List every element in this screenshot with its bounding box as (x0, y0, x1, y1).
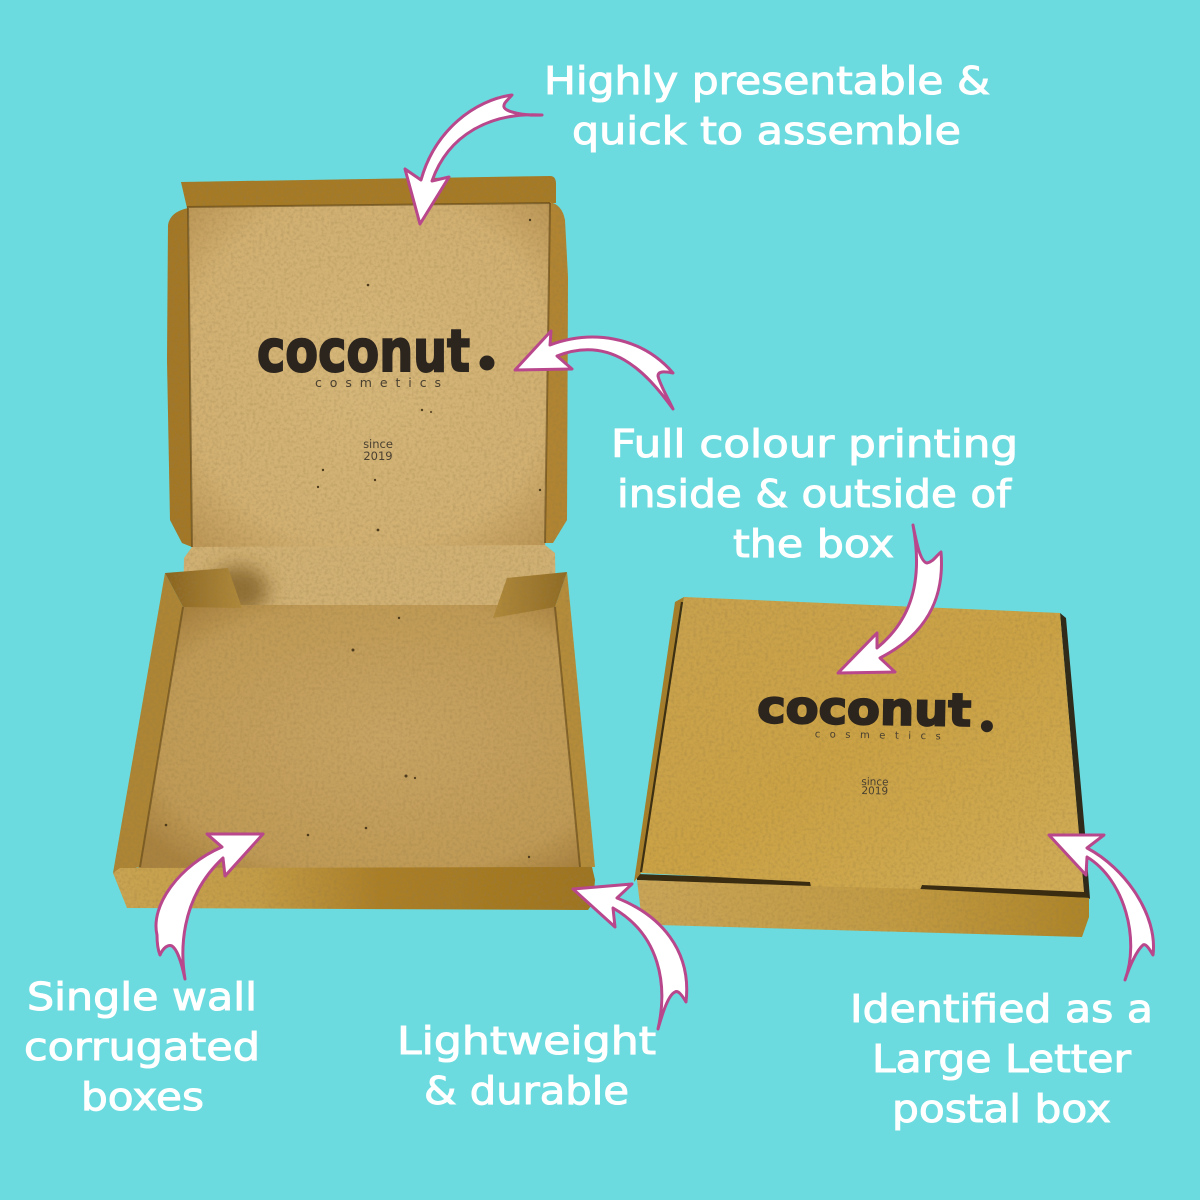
logo tagline: cosmetics (315, 375, 441, 390)
caption: large letter: postal box (892, 1087, 1111, 1131)
tray left corner tab (165, 568, 242, 608)
open box lid (167, 176, 568, 610)
open box (113, 176, 595, 910)
caption: printing (611, 422, 1018, 566)
caption: lightweight: Lightweight (397, 1019, 656, 1063)
arrow: large letter (1049, 835, 1154, 980)
tray left wall (113, 573, 183, 873)
caption: single wall: corrugated (24, 1025, 260, 1069)
closed year text: 2019 (861, 785, 888, 798)
since text: since (363, 437, 393, 451)
lid inner panel (188, 203, 550, 552)
lid left flap (167, 208, 192, 547)
tray right corner tab (493, 572, 567, 618)
arrow: lightweight (573, 884, 687, 1029)
closed box front (637, 880, 1089, 937)
lid right flap (545, 202, 568, 543)
tray floor (138, 605, 582, 870)
tray front wall (113, 867, 595, 910)
closed logo wordmark: coconut (757, 680, 972, 737)
logo wordmark: coconut (257, 317, 470, 385)
closed box logo (756, 680, 994, 799)
closed box gap under lid (637, 874, 1089, 898)
caption: lightweight: & durable (424, 1069, 629, 1113)
closed box (634, 597, 1090, 937)
caption: printing: inside & outside of (617, 472, 1013, 516)
hinge panel (183, 545, 556, 610)
caption: single wall (24, 975, 260, 1119)
caption: large letter (850, 987, 1153, 1131)
caption: single wall: boxes (81, 1075, 204, 1119)
caption: large letter: Large Letter (872, 1037, 1131, 1081)
hinge shadow (208, 566, 268, 614)
caption: single wall: Single wall (27, 975, 257, 1019)
closed box edge lines (641, 602, 682, 872)
logo dot (480, 356, 494, 370)
closed logo tagline: cosmetics (815, 729, 941, 742)
paper specks (165, 219, 541, 858)
tray right wall (555, 572, 595, 867)
open box tray (113, 568, 595, 910)
arrow: printing outside (838, 525, 941, 673)
closed since text: since (861, 776, 889, 789)
caption: presentable: Highly presentable & (544, 59, 990, 103)
closed logo dot (981, 720, 993, 732)
caption: presentable (544, 59, 990, 153)
closed box body (634, 597, 1089, 937)
logo on lid (257, 317, 494, 463)
year text: 2019 (363, 449, 393, 463)
caption: presentable: quick to assemble (572, 109, 961, 153)
lid top flap (181, 176, 556, 208)
tray shadow lines (140, 203, 580, 867)
arrow: presentable (405, 95, 542, 224)
caption: printing: Full colour printing (611, 422, 1018, 466)
caption: lightweight (397, 1019, 656, 1113)
arrow: single wall (156, 834, 263, 979)
caption: printing: the box (733, 522, 894, 566)
closed box right gap (1060, 613, 1090, 899)
arrow: printing inside (515, 331, 673, 409)
caption: large letter: Identified as a (850, 987, 1153, 1031)
closed box left side (634, 597, 684, 882)
closed box lid top (641, 597, 1084, 892)
